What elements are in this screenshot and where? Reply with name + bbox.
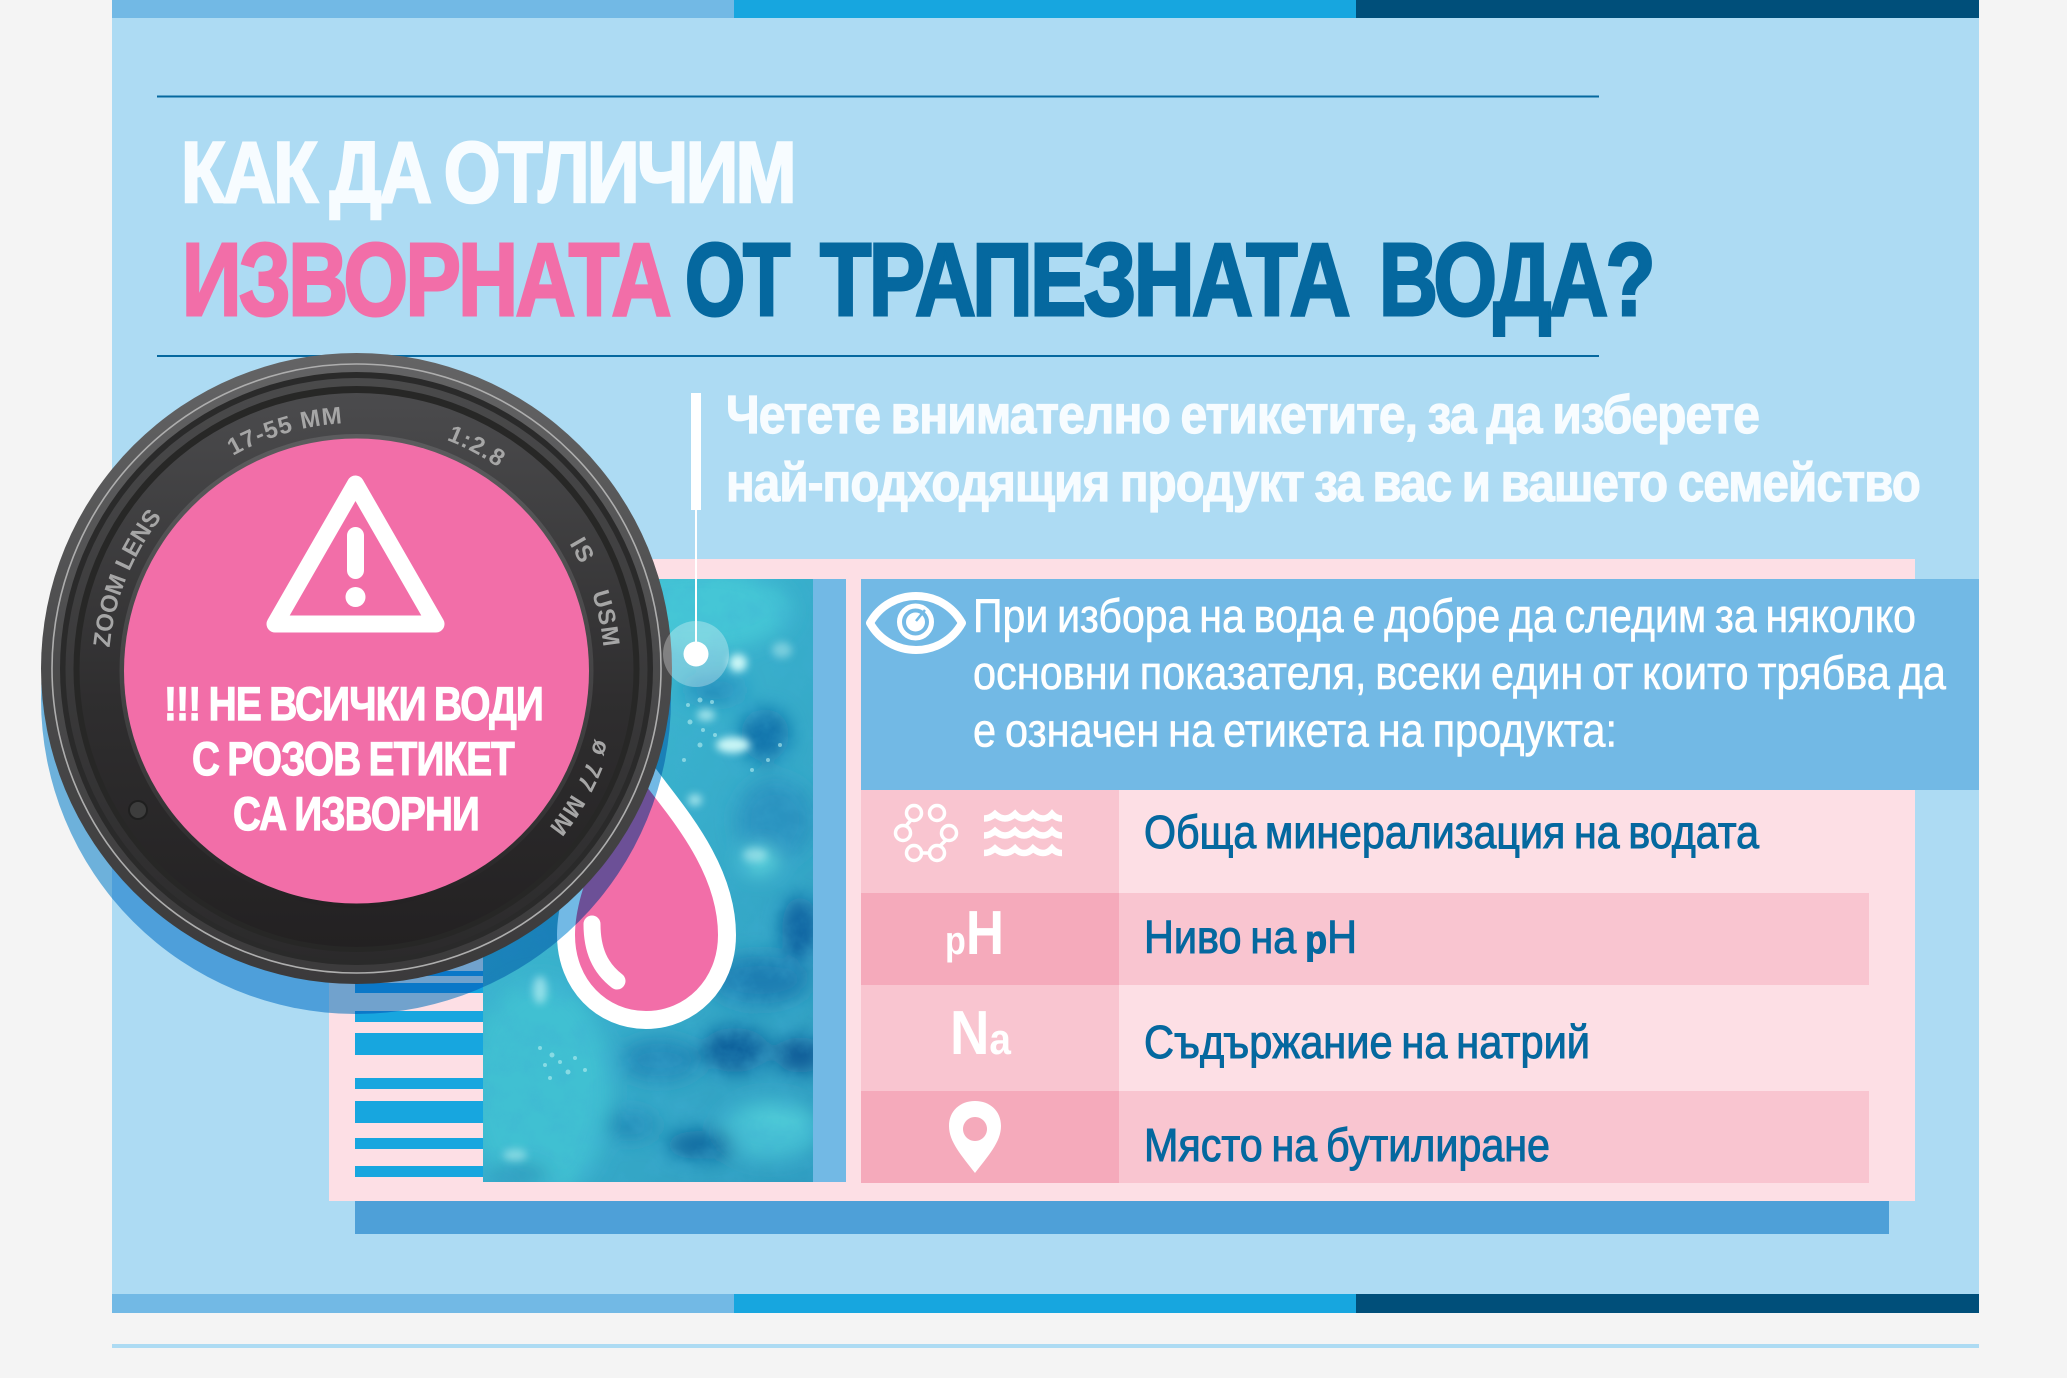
icon: map pin: [949, 1101, 1001, 1173]
pink card: [329, 559, 1915, 1201]
lens engravings: IS: [570, 536, 593, 562]
indicators table: [861, 790, 1869, 1183]
icon: waves: [984, 814, 1062, 853]
title line 2 pink word: ИЗВОРНАТА: [182, 222, 669, 337]
row 1: mineralization: Обща минерализация на водата: [1144, 806, 1759, 858]
row 2: pH: pH: [945, 899, 1004, 968]
info paragraph: При избора на вода е добре да следим за няколко: [973, 589, 1916, 642]
warning text: [164, 677, 543, 840]
callout connector: [663, 393, 729, 687]
warning text: !!! НЕ ВСИЧКИ ВОДИ: [164, 677, 543, 730]
lens drop shadow: [41, 384, 671, 1014]
lens engravings: ZOOM LENS: [93, 510, 160, 647]
lens engravings: [93, 406, 620, 836]
title: [181, 125, 1653, 337]
row 2: pH: Ниво на pH: [1144, 911, 1357, 963]
row 2: pH: [861, 893, 1869, 985]
title line 1: КАК ДА ОТЛИЧИМ: [181, 125, 794, 221]
warning text: СА ИЗВОРНИ: [233, 787, 479, 840]
title line 2 blue words: ОТ: [685, 222, 790, 337]
info header panel: [861, 579, 1979, 790]
barcode stripes: [355, 971, 483, 1177]
pink water drop: [566, 762, 727, 1020]
lens engravings: USM: [594, 590, 620, 646]
lens engravings: 17-55 MM: [228, 406, 341, 455]
title line 2 blue words: ВОДА?: [1379, 222, 1653, 337]
title line 2 blue words: ТРАПЕЗНАТА: [820, 222, 1349, 337]
row 3: sodium: Na: [950, 999, 1011, 1068]
info paragraph: [973, 589, 1947, 756]
icon: warning triangle: [275, 484, 436, 624]
bottom colour bar: [112, 1294, 1979, 1313]
camera lens warning badge: [41, 353, 672, 984]
top colour bar: [112, 0, 1979, 18]
title line 2 blue words: [685, 222, 1653, 337]
lens engravings: ø 77 MM: [550, 738, 606, 836]
subtitle: [726, 385, 1920, 513]
lens rings: [41, 353, 672, 984]
warning text: С РОЗОВ ЕТИКЕТ: [192, 732, 515, 785]
pink lens glass: [124, 438, 589, 904]
lens engravings: 1:2.8: [448, 426, 505, 466]
shadow bar under card: [355, 1201, 1889, 1234]
blue band beside photo: [813, 579, 846, 1182]
info paragraph: основни показателя, всеки един от които трябва да: [973, 646, 1947, 699]
row 3: sodium: Съдържание на натрий: [1144, 1016, 1590, 1068]
row 4: bottling place: Място на бутилиране: [1144, 1119, 1550, 1171]
water photo: [483, 579, 813, 1182]
subtitle: Четете внимателно етикетите, за да изберете: [726, 385, 1759, 445]
icon: molecule: [896, 806, 956, 860]
row 4: bottling place: [861, 1091, 1869, 1183]
row 3: sodium: [861, 985, 1590, 1091]
subtitle: най-подходящия продукт за вас и вашето семейство: [726, 453, 1920, 513]
icon: eye: [870, 596, 962, 650]
info paragraph: е означен на етикета на продукта:: [973, 704, 1617, 756]
row 1: mineralization: [861, 790, 1759, 893]
